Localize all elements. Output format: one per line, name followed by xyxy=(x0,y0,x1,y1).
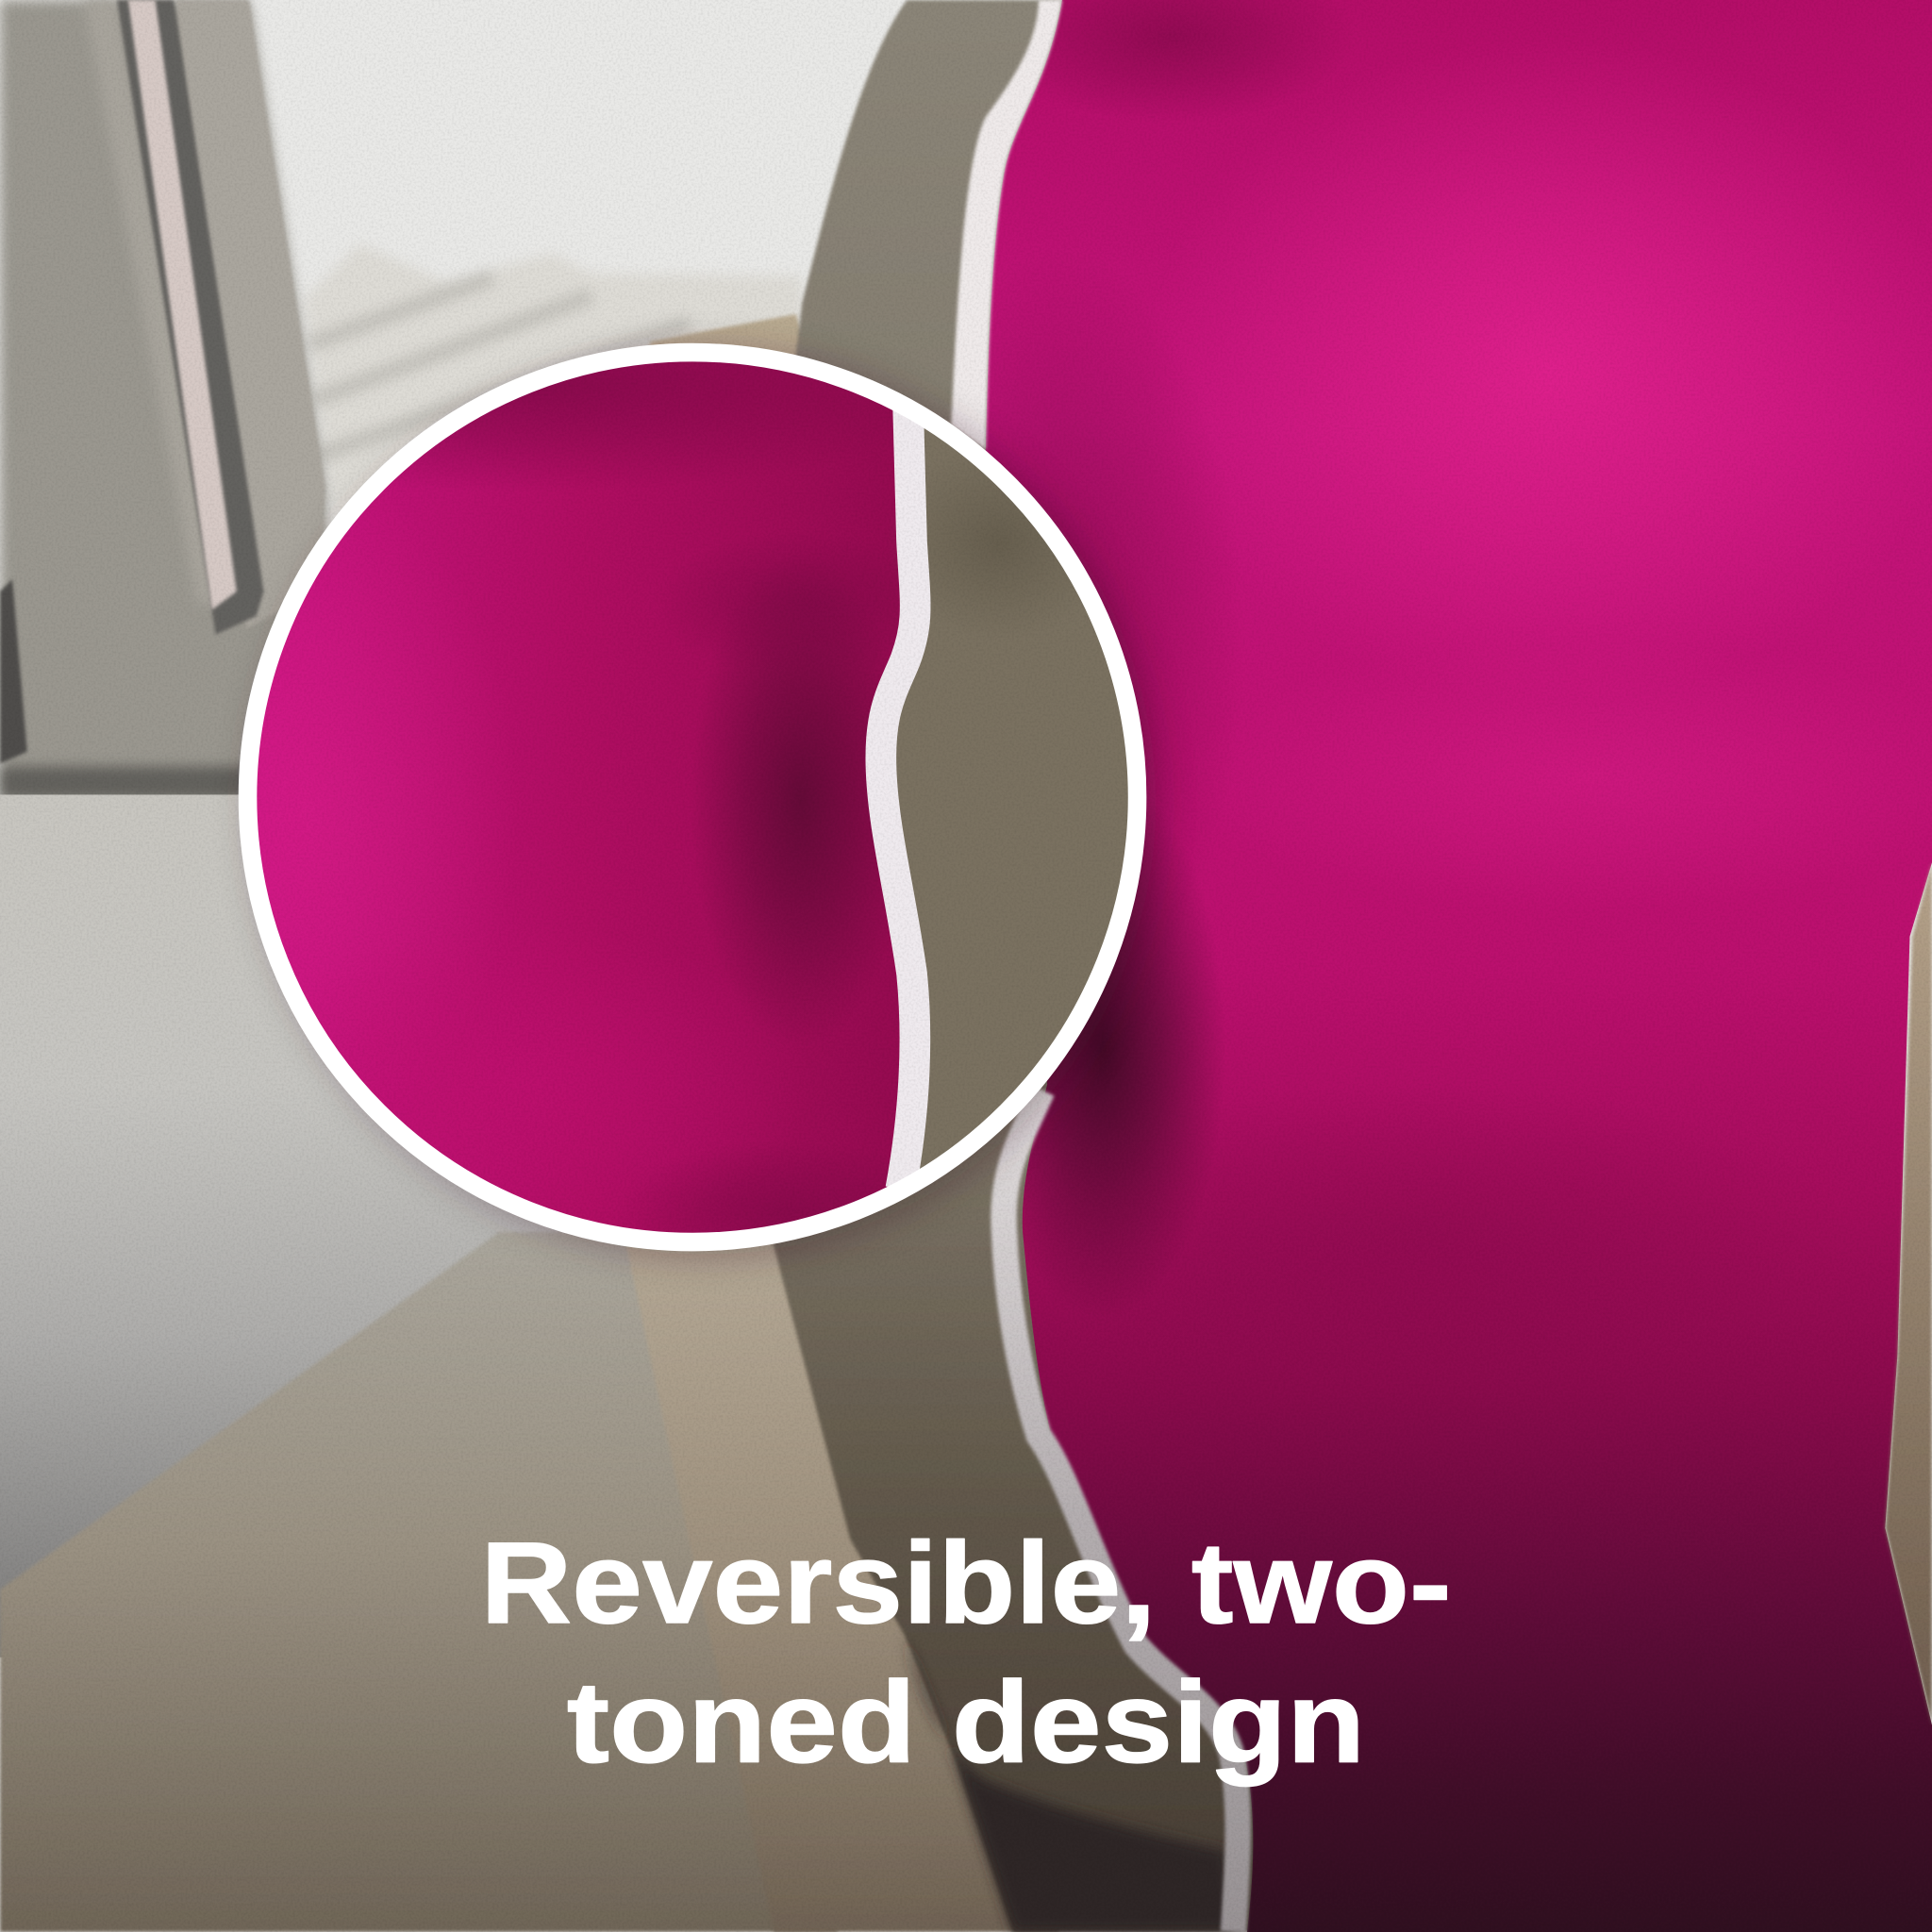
zoomed white piping xyxy=(881,407,915,1189)
caption heading xyxy=(480,1519,1452,1788)
zoomed magenta fabric xyxy=(246,351,937,1239)
lens fabric grain xyxy=(246,351,1146,1239)
magnifier circle shadow xyxy=(254,353,1156,1255)
magnifier white ring xyxy=(248,353,1138,1242)
pillow burlap edge xyxy=(1885,862,1932,1725)
zoomed khaki fabric xyxy=(896,428,1128,1169)
window frame xyxy=(0,0,333,801)
sofa seat: beige linen xyxy=(0,1232,838,1932)
khaki cushion back xyxy=(740,0,1281,1932)
white piping lower xyxy=(1004,1091,1238,1932)
blinds seen through window xyxy=(305,244,802,518)
caption heading: toned design xyxy=(567,1658,1365,1788)
pillow tonal highlights and shadows xyxy=(986,0,1852,1300)
sofa back: linen strip xyxy=(624,314,1059,1932)
magnifier detail circle xyxy=(238,343,1147,1251)
magenta pillow xyxy=(986,0,1932,1932)
white piping upper xyxy=(951,0,1062,450)
caption heading: Reversible, two- xyxy=(480,1519,1452,1648)
dark crease at bottom of cushion xyxy=(905,1635,1239,1932)
